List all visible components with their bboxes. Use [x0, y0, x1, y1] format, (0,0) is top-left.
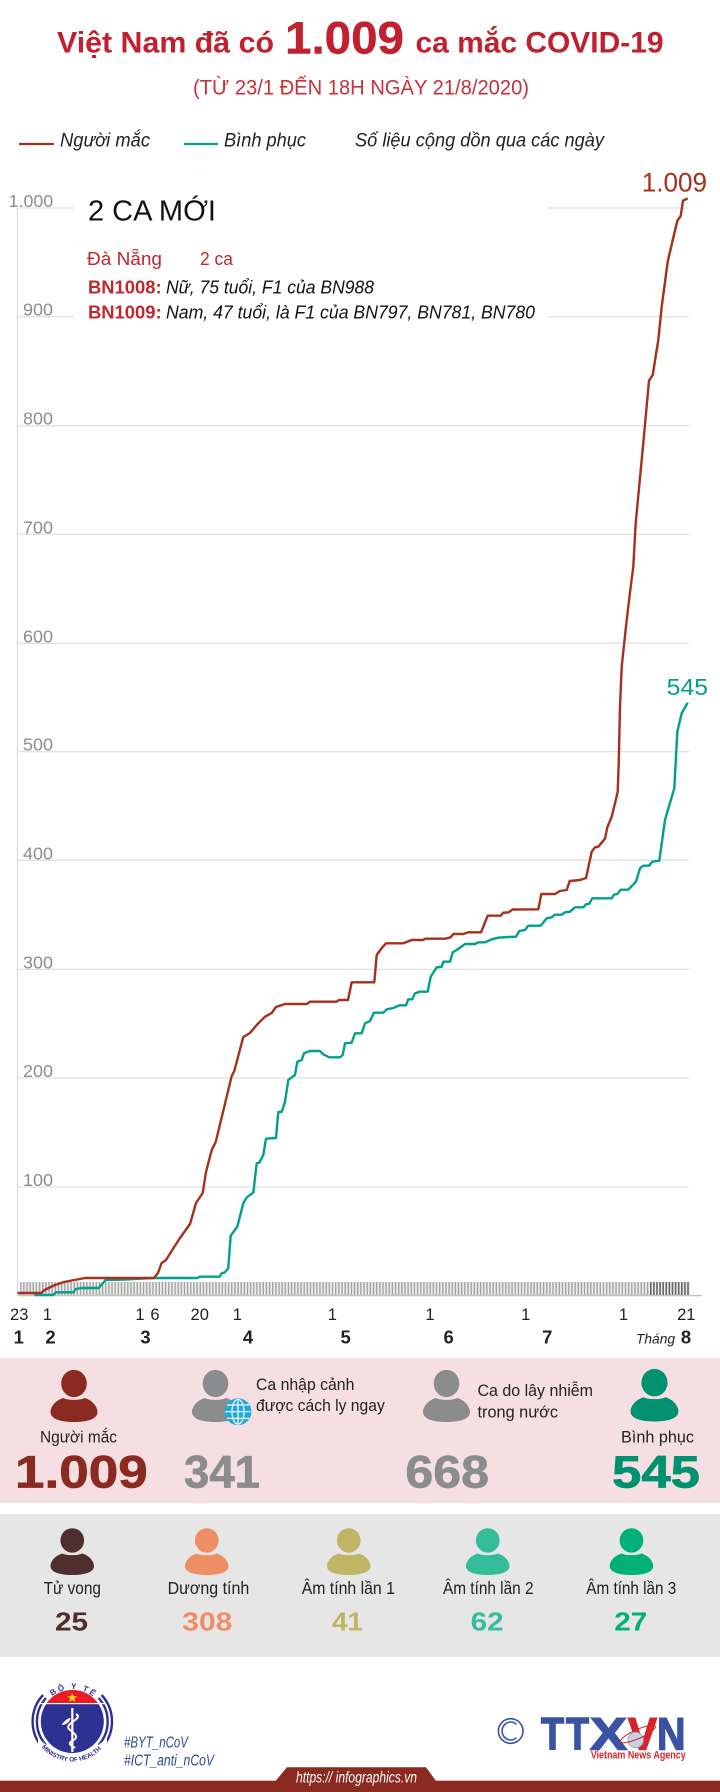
status: positive	[168, 1528, 249, 1637]
x axis day labels: 1	[233, 1306, 242, 1324]
hashtags	[124, 1734, 215, 1770]
y axis labels: 500	[23, 735, 53, 755]
panel: patient status	[0, 1514, 720, 1657]
x axis day labels	[10, 1306, 695, 1324]
status: deaths: Tử vong	[44, 1578, 101, 1598]
title: 1.009	[285, 12, 404, 63]
hashtags: #ICT_anti_nCoV	[124, 1753, 215, 1770]
x axis month labels: 1	[14, 1326, 24, 1347]
status: negative twice	[443, 1528, 534, 1637]
stat: recovered	[612, 1428, 700, 1497]
x axis month labels: 8	[681, 1326, 691, 1347]
stat: imported cases	[184, 1375, 385, 1497]
new cases text block	[87, 195, 535, 322]
legend	[19, 129, 605, 152]
x axis month labels: 2	[45, 1326, 56, 1347]
y axis labels: 800	[23, 409, 53, 429]
x axis month labels: 5	[341, 1326, 351, 1347]
x axis day labels: 6	[150, 1306, 160, 1324]
status: deaths: 25	[55, 1607, 88, 1637]
patient BN1009: Nam, 47 tuổi, là F1 của BN797, BN781, BN780	[166, 302, 535, 322]
stat: domestic cases: trong nước	[478, 1402, 558, 1421]
title: ca mắc COVID-19	[416, 26, 664, 60]
legend: Số liệu cộng dồn qua các ngày	[355, 130, 605, 152]
x axis month labels: 7	[542, 1326, 552, 1347]
y axis labels: 200	[23, 1061, 53, 1081]
daily tick band	[18, 1282, 702, 1296]
logo: Ministry of Health: BỘ Y TẾ	[50, 1683, 97, 1696]
stat: infected: 1.009	[15, 1446, 148, 1497]
status: negative twice: 62	[471, 1607, 504, 1637]
x axis month labels: 6	[443, 1326, 454, 1347]
location: 2 ca	[200, 248, 234, 269]
stat: domestic cases: 668	[405, 1446, 489, 1497]
title: Việt Nam đã có	[57, 27, 274, 60]
stat: imported cases: được cách ly ngay	[256, 1396, 385, 1415]
icon: domestic case person	[423, 1370, 470, 1422]
x axis day labels: 1	[619, 1306, 628, 1324]
logo: TTXVN: V	[628, 1709, 657, 1760]
footer band	[0, 1767, 720, 1792]
status: deaths	[44, 1528, 101, 1637]
stat: domestic cases	[405, 1381, 593, 1497]
location: Đà Nẵng	[87, 248, 162, 269]
new cases heading: 2 CA MỚI	[88, 195, 216, 228]
y axis labels: 300	[23, 952, 53, 972]
x axis day labels: 1	[135, 1306, 145, 1324]
hashtags: #BYT_nCoV	[124, 1734, 189, 1751]
stat: infected	[15, 1428, 148, 1497]
title	[57, 12, 664, 63]
y axis labels: 600	[23, 626, 53, 646]
x axis day labels: 1	[43, 1306, 52, 1324]
end value: infected: 1.009	[642, 168, 707, 198]
logo: TTXVN: T	[566, 1709, 589, 1760]
status: positive: Dương tính	[168, 1578, 249, 1598]
y axis labels: 1.000	[9, 191, 53, 211]
x axis month labels: 3	[140, 1326, 151, 1347]
x axis day labels: 21	[677, 1306, 695, 1324]
legend: Người mắc	[60, 129, 150, 152]
logo: TTXVN: N	[657, 1709, 686, 1760]
x axis day labels: 1	[521, 1306, 530, 1324]
panel: totals	[0, 1358, 720, 1503]
logo: Ministry of Health	[31, 1683, 114, 1762]
x axis day labels: 20	[191, 1306, 209, 1324]
status: negative twice: Âm tính lần 2	[443, 1578, 534, 1598]
patient BN1009: BN1009:	[88, 302, 162, 322]
y axis labels: 400	[23, 843, 53, 863]
y axis labels: 100	[23, 1170, 53, 1190]
status: negative three times: Âm tính lần 3	[586, 1578, 676, 1598]
icon: copyright	[498, 1719, 523, 1743]
x axis month labels: 4	[243, 1326, 254, 1347]
x axis month labels: Tháng	[636, 1330, 675, 1346]
y axis labels: 900	[23, 300, 53, 320]
logo: TTXVN	[541, 1709, 686, 1761]
stat: imported cases: Ca nhập cảnh	[256, 1375, 354, 1394]
status: negative three times: 27	[614, 1607, 647, 1637]
y axis labels	[9, 191, 53, 1190]
logo: Ministry of Health: MINISTRY OF HEALTH	[42, 1744, 102, 1762]
y axis labels: 700	[23, 517, 53, 537]
icon: imported case person with globe	[192, 1370, 251, 1425]
subtitle: (TỪ 23/1 ĐẾN 18H NGÀY 21/8/2020)	[193, 74, 529, 99]
location	[87, 248, 234, 269]
stat: recovered: 545	[612, 1446, 700, 1497]
x axis day labels: 1	[328, 1306, 337, 1324]
status: negative once: Âm tính lần 1	[302, 1578, 395, 1598]
stat: recovered: Bình phục	[621, 1428, 694, 1447]
x axis day labels: 1	[425, 1306, 435, 1324]
infected line	[18, 198, 688, 1293]
source url: https:// infographics.vn	[296, 1770, 417, 1787]
logo: TTXVN: Vietnam News Agency	[591, 1749, 686, 1761]
stat: imported cases: 341	[184, 1446, 260, 1497]
status: negative three times	[586, 1528, 676, 1637]
x axis month labels	[14, 1326, 691, 1347]
end value: recovered: 545	[667, 674, 708, 700]
logo: TTXVN: T	[541, 1709, 564, 1760]
patient BN1008: Nữ, 75 tuổi, F1 của BN988	[166, 277, 374, 297]
status: negative once: 41	[332, 1607, 363, 1637]
logo: TTXVN: X	[590, 1709, 627, 1760]
recovered line	[34, 703, 688, 1295]
legend: Bình phục	[224, 130, 306, 152]
stat: domestic cases: Ca do lây nhiễm	[478, 1381, 593, 1400]
icon: infected person	[50, 1370, 98, 1422]
x axis day labels: 23	[10, 1306, 28, 1324]
status: positive: 308	[182, 1607, 232, 1637]
patient BN1008: BN1008:	[88, 277, 162, 297]
status: negative once	[302, 1528, 395, 1637]
line chart	[9, 168, 708, 1347]
icon: recovered person	[630, 1369, 678, 1422]
stat: infected: Người mắc	[40, 1428, 117, 1447]
